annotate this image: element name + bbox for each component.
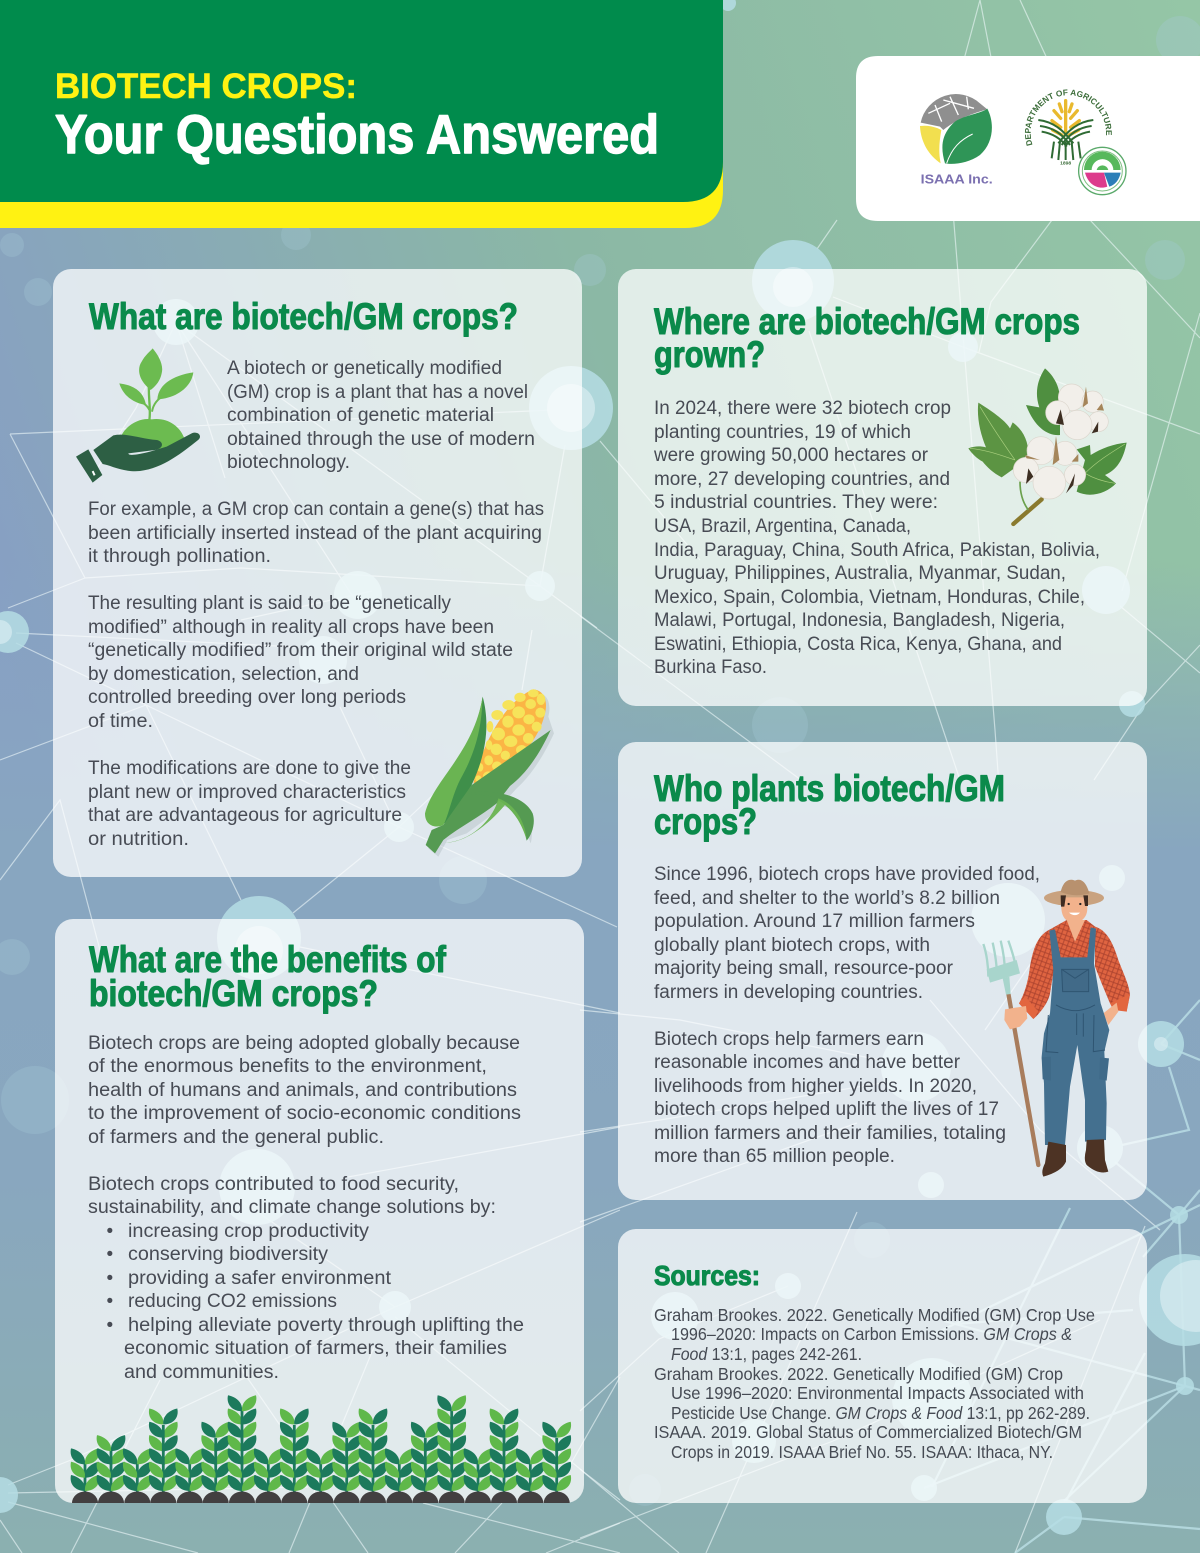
icon: hand holding sprout <box>76 348 200 483</box>
text block: references: Food 13:1, pages 242-261. <box>671 1344 862 1364</box>
panel: who plants <box>618 742 1147 1200</box>
title eyebrow: BIOTECH CROPS: <box>55 66 357 106</box>
icon: farmer <box>983 880 1130 1177</box>
text block: were growing 50,000 hectares or <box>653 445 929 466</box>
text block: references: ISAAA. 2019. Global Status of Commercialized Biotech/GM <box>654 1422 1082 1442</box>
text block: A biotech or genetically modified <box>227 358 502 379</box>
logo panel <box>856 56 1200 221</box>
text block: Biotech crops are being adopted globally because <box>88 1033 520 1054</box>
panel: where grown <box>618 269 1147 706</box>
logo label: 1898 <box>1060 161 1071 167</box>
text block <box>88 1174 496 1218</box>
text block: Biotech crops help farmers earn <box>654 1029 924 1050</box>
text block: obtained through the use of modern <box>227 429 535 450</box>
text block: The modifications are done to give the <box>88 758 411 779</box>
text block: references: Use 1996–2020: Environmental Impacts Associated with <box>671 1383 1084 1403</box>
icon: row of crops <box>71 1395 571 1503</box>
text block: references: Graham Brookes. 2022. Genetically Modified (GM) Crop <box>654 1364 1063 1384</box>
text block: more than 65 million people. <box>654 1146 895 1167</box>
title banner <box>0 0 723 228</box>
text block: globally plant biotech crops, with <box>654 935 930 956</box>
text block: majority being small, resource-poor <box>654 958 954 979</box>
bullet list <box>106 1221 524 1383</box>
text block: livelihoods from higher yields. In 2020, <box>654 1076 977 1097</box>
bullet list: • <box>106 1268 113 1289</box>
text block <box>88 499 544 567</box>
bullet list: economic situation of farmers, their families <box>124 1338 507 1359</box>
text block: biotech crops helped uplift the lives of 17 <box>654 1099 999 1120</box>
text block: population. Around 17 million farmers <box>654 911 975 932</box>
heading: crops? <box>654 801 757 842</box>
text block: controlled breeding over long periods <box>88 687 406 708</box>
text block: Burkina Faso. <box>654 657 767 678</box>
text block: “genetically modified” from their original wild state <box>88 640 513 661</box>
bullet list: • <box>106 1291 113 1312</box>
text block: The resulting plant is said to be “genetically <box>88 593 451 614</box>
panel: benefits <box>55 919 584 1503</box>
text block: Mexico, Spain, Colombia, Vietnam, Honduras, Chile, <box>654 587 1085 608</box>
text block: or nutrition. <box>88 829 189 850</box>
text block: to the improvement of socio-economic conditions <box>88 1103 521 1124</box>
text block: more, 27 developing countries, and <box>654 469 950 490</box>
text block: 5 industrial countries. They were: <box>654 492 938 513</box>
heading: Sources: <box>654 1260 760 1291</box>
text block: million farmers and their families, totaling <box>654 1123 1006 1144</box>
text block: Since 1996, biotech crops have provided food, <box>654 864 1040 885</box>
text block <box>654 864 1040 1003</box>
text block: references: Crops in 2019. ISAAA Brief No. 55. ISAAA: Ithaca, NY. <box>671 1442 1053 1462</box>
text block: Uruguay, Philippines, Australia, Myanmar, Sudan, <box>654 563 1066 584</box>
text block: Eswatini, Ethiopia, Costa Rica, Kenya, Ghana, and <box>654 634 1062 655</box>
text block <box>654 1029 1006 1167</box>
bullet list: helping alleviate poverty through uplifting the <box>128 1315 524 1336</box>
logo: ISAAA <box>920 94 993 186</box>
heading: What are biotech/GM crops? <box>89 296 518 337</box>
text block: In 2024, there were 32 biotech crop <box>654 398 951 419</box>
text block: references: 1996–2020: Impacts on Carbon Emissions. GM Crops & <box>671 1324 1072 1344</box>
text block: it through pollination. <box>88 546 271 567</box>
main title: Your Questions Answered <box>55 103 659 165</box>
text block: feed, and shelter to the world’s 8.2 billion <box>654 888 1000 909</box>
heading: Who plants biotech/GM <box>654 768 1005 809</box>
heading: Where are biotech/GM crops <box>654 301 1080 342</box>
text block: biotechnology. <box>227 452 350 473</box>
bullet list: • <box>106 1315 113 1336</box>
panel: sources <box>618 1229 1147 1503</box>
text block: references: Pesticide Use Change. GM Crops & Food 13:1, pp 262-289. <box>671 1403 1090 1423</box>
bullet list: reducing CO2 emissions <box>128 1291 337 1312</box>
heading <box>654 301 1080 375</box>
heading: grown? <box>654 334 765 375</box>
logo: Department of Agriculture: DEPARTMENT OF AGRICULTURE <box>1024 89 1112 146</box>
text block <box>88 1033 521 1148</box>
text block: For example, a GM crop can contain a gene(s) that has <box>88 499 544 520</box>
text block: Malawi, Portugal, Indonesia, Bangladesh, Nigeria, <box>654 610 1065 631</box>
bullet list: and communities. <box>124 1362 279 1383</box>
text block <box>88 758 411 850</box>
text block: references <box>654 1305 1095 1462</box>
text block <box>227 358 535 473</box>
text block <box>88 593 513 732</box>
text block: of the enormous benefits to the environment, <box>88 1056 487 1077</box>
text block: combination of genetic material <box>227 405 494 426</box>
text block: plant new or improved characteristics <box>88 782 406 803</box>
logo: Department of Agriculture <box>1024 89 1127 196</box>
text block: planting countries, 19 of which <box>654 422 911 443</box>
heading <box>89 939 447 1014</box>
text block: India, Paraguay, China, South Africa, Pakistan, Bolivia, <box>654 540 1100 561</box>
icon: cotton plant <box>968 368 1127 524</box>
heading: What are the benefits of <box>89 939 447 980</box>
text block: that are advantageous for agriculture <box>88 805 402 826</box>
icon: corn cob <box>425 689 554 857</box>
logo label: ISAAA Inc. <box>921 171 993 186</box>
text block: farmers in developing countries. <box>654 982 923 1003</box>
text block <box>653 398 1100 678</box>
heading: biotech/GM crops? <box>89 973 378 1014</box>
bullet list: increasing crop productivity <box>128 1221 370 1242</box>
panel: what are biotech crops <box>53 269 582 877</box>
text block: modified” although in reality all crops have been <box>88 617 494 638</box>
bullet list: conserving biodiversity <box>128 1244 329 1265</box>
text block: by domestication, selection, and <box>88 664 359 685</box>
text block: of farmers and the general public. <box>88 1127 384 1148</box>
heading <box>654 768 1005 842</box>
text block: sustainability, and climate change solutions by: <box>88 1197 496 1218</box>
text block: of time. <box>88 711 153 732</box>
text block: been artificially inserted instead of the plant acquiring <box>88 523 542 544</box>
bullet list: • <box>106 1244 113 1265</box>
text block: (GM) crop is a plant that has a novel <box>227 382 528 403</box>
bullet list: providing a safer environment <box>128 1268 392 1289</box>
text block: Biotech crops contributed to food security, <box>88 1174 459 1195</box>
text block: health of humans and animals, and contributions <box>88 1080 517 1101</box>
text block: reasonable incomes and have better <box>654 1052 961 1073</box>
bullet list: • <box>106 1221 113 1242</box>
text block: references: Graham Brookes. 2022. Genetically Modified (GM) Crop Use <box>654 1305 1095 1325</box>
text block: USA, Brazil, Argentina, Canada, <box>654 516 911 537</box>
